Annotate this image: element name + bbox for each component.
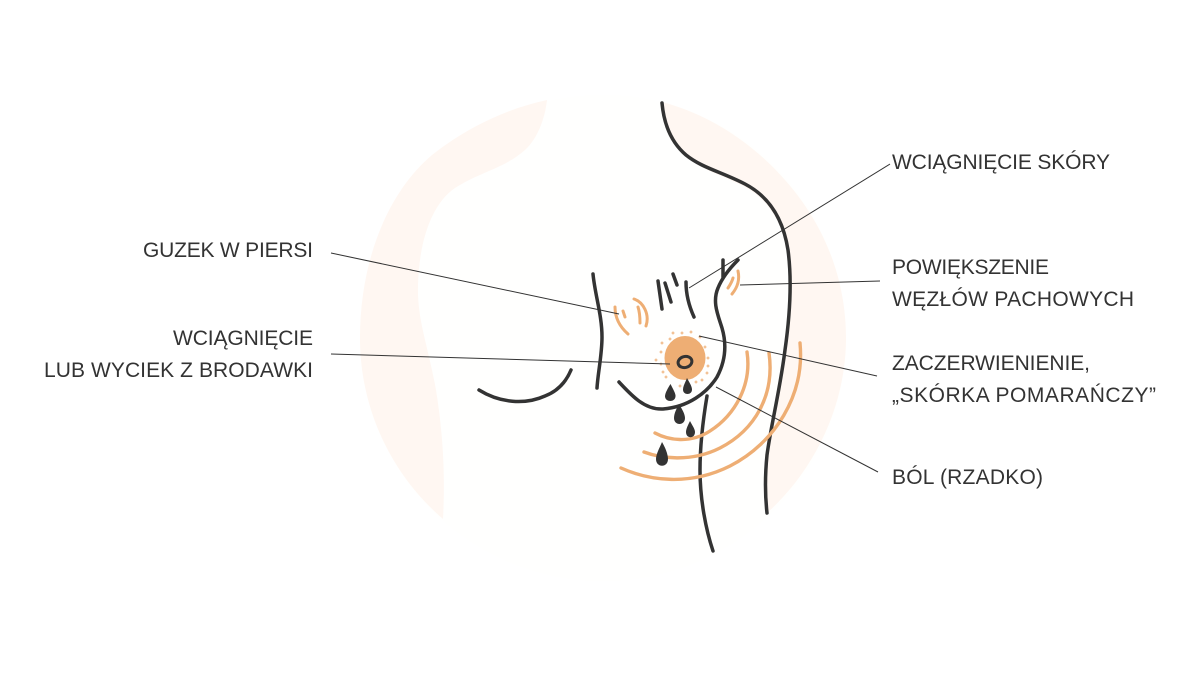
lump arcs: [615, 299, 647, 334]
orange peel dots: [654, 330, 710, 388]
left breast curve: [479, 370, 571, 402]
arm inner line: [700, 396, 713, 551]
label: nipple retraction or discharge: WCIĄGNIĘCIE: [173, 327, 313, 350]
body outline: [479, 103, 790, 551]
lymph node arcs: [728, 271, 739, 294]
peach silhouette: left side: [360, 100, 547, 519]
label: lump: GUZEK W PIERSI: [143, 239, 313, 262]
label: redness, orange peel skin: „SKÓRKA POMARAŃCZY”: [892, 384, 1156, 407]
label: skin retraction: WCIĄGNIĘCIE SKÓRY: [892, 151, 1110, 174]
leader lines: [331, 164, 890, 472]
label: redness, orange peel skin: ZACZERWIENIENIE,: [892, 352, 1090, 375]
pain waves: [621, 343, 801, 479]
label: enlarged axillary nodes: [892, 256, 1134, 311]
areola: [664, 336, 706, 380]
background circle: [360, 95, 846, 581]
label: enlarged axillary nodes: WĘZŁÓW PACHOWYCH: [892, 288, 1134, 311]
label: redness, orange peel skin: [892, 352, 1156, 407]
skin dimple lines: [658, 281, 662, 309]
neck and shoulder line: [662, 103, 790, 513]
breast outline: [619, 260, 738, 409]
discharge drops: [656, 378, 695, 466]
label: enlarged axillary nodes: POWIĘKSZENIE: [892, 256, 1049, 279]
label: pain: BÓL (RZADKO): [892, 466, 1043, 489]
label: nipple retraction or discharge: [44, 327, 313, 382]
peach silhouette: right side: [662, 102, 846, 513]
label: nipple retraction or discharge: LUB WYCIEK Z BRODAWKI: [44, 359, 313, 382]
armpit fold: [721, 260, 725, 277]
nipple: [677, 355, 693, 369]
torso line: [593, 274, 602, 388]
